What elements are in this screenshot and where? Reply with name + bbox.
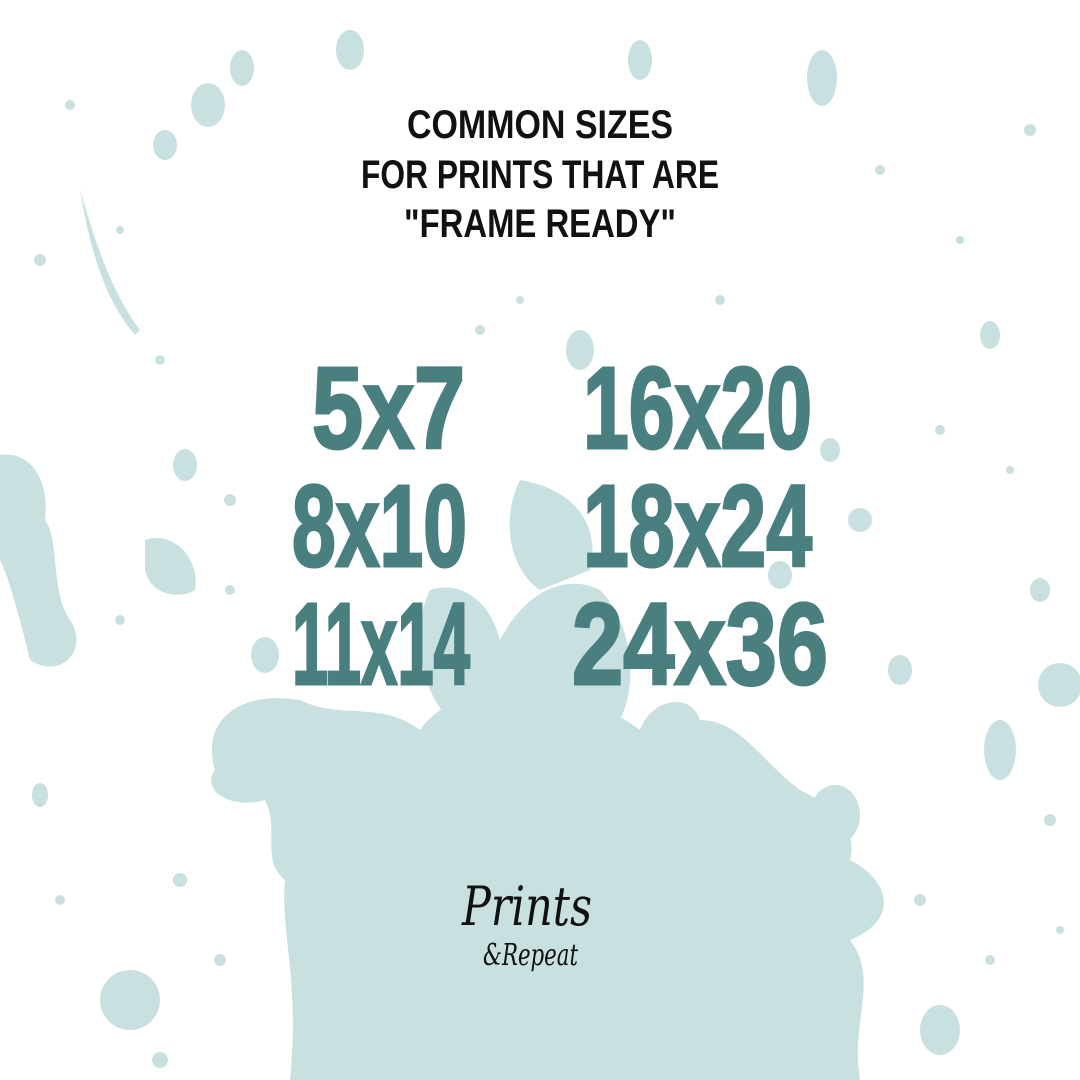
size 16x20: 16x20 [583, 343, 812, 473]
title: FOR PRINTS THAT ARE [361, 153, 719, 197]
logo: &Repeat [483, 938, 579, 973]
title [361, 103, 719, 246]
size 11x14: 11x14 [292, 579, 470, 709]
size 18x24: 18x24 [583, 461, 812, 591]
size 8x10: 8x10 [292, 461, 467, 591]
title: "FRAME READY" [404, 202, 676, 246]
size 5x7: 5x7 [312, 343, 465, 473]
sizes grid [292, 343, 828, 709]
size 24x36: 24x36 [572, 579, 828, 709]
logo [461, 875, 592, 973]
logo: Prints [461, 875, 592, 938]
title: COMMON SIZES [407, 103, 673, 147]
